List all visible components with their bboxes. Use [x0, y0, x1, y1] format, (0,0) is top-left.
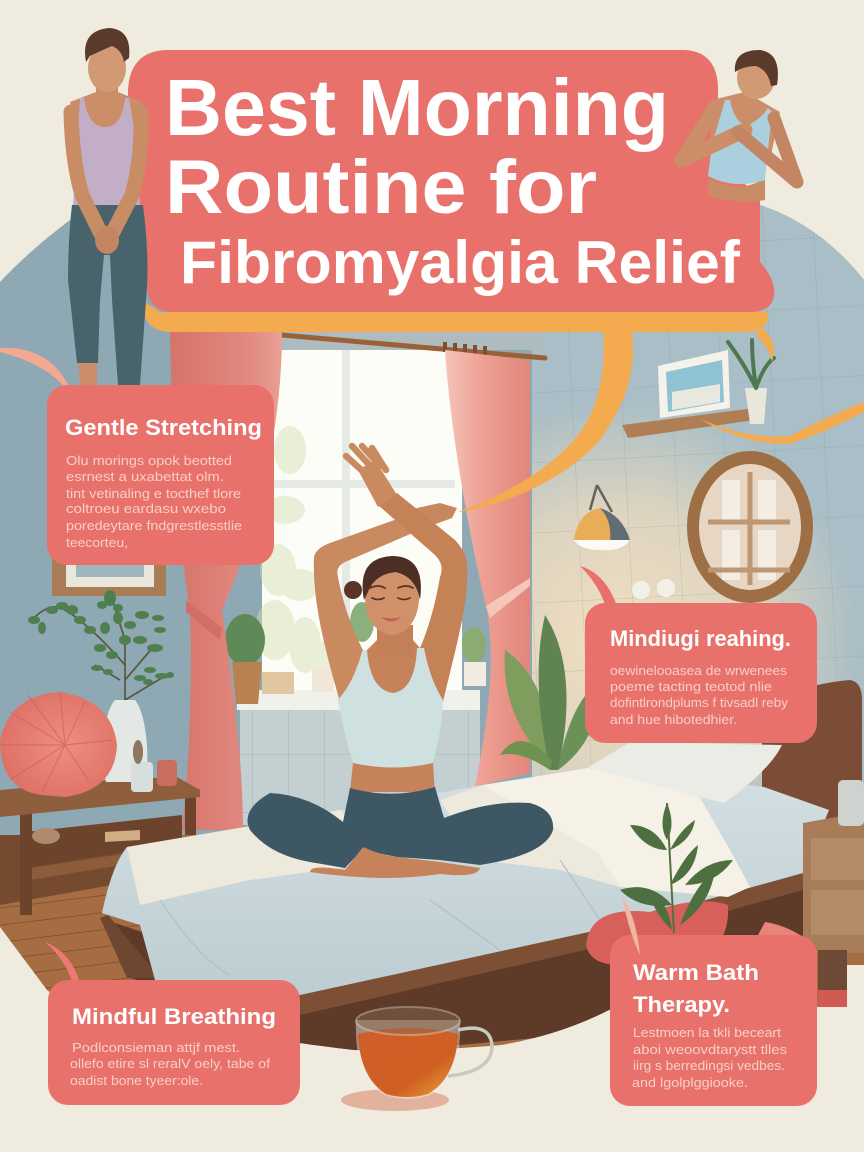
card heading: Warm Bath	[633, 960, 759, 985]
hair	[735, 50, 778, 86]
blue tank top	[708, 100, 772, 184]
lips	[381, 617, 401, 622]
window	[237, 332, 542, 825]
picture frame behind card	[52, 558, 166, 596]
card heading: Gentle Stretching	[65, 415, 262, 440]
arm A	[314, 508, 430, 702]
card body: and lgolplggiooke.	[632, 1075, 748, 1090]
chest	[710, 92, 780, 160]
potted plant right of curtain	[500, 615, 589, 770]
clasped hands	[95, 226, 119, 254]
face	[365, 561, 419, 635]
card: Mindful Breathing	[45, 942, 300, 1105]
standing figure: right	[682, 50, 797, 202]
lavender tank top	[73, 98, 140, 205]
bed mattress and sheet	[102, 768, 829, 995]
wall shelf with frame and plant	[622, 340, 774, 438]
floor objects by nightstand	[818, 950, 847, 1007]
standing figure: left	[68, 28, 147, 385]
right curtain	[445, 350, 530, 787]
hair	[85, 28, 129, 62]
jars on table	[131, 740, 177, 792]
red towel	[586, 901, 728, 965]
pink towel piece	[758, 922, 800, 936]
title banner	[128, 50, 774, 312]
left curtain	[170, 332, 282, 830]
feet	[310, 847, 480, 878]
card body: esrnest a uxabettat olm.	[66, 469, 224, 484]
window foliage	[256, 426, 330, 673]
face	[737, 57, 775, 99]
card body: aboi weoovdtarystt tlles	[633, 1042, 788, 1057]
card body: Lestmoen la tkli beceart	[633, 1025, 781, 1040]
side table	[0, 777, 200, 915]
card body: teecorteu,	[66, 535, 128, 550]
curtain tie	[186, 600, 222, 640]
floor	[0, 835, 864, 1065]
card heading: Mindiugi reahing.	[610, 626, 791, 651]
card body: iirg s berredingsi vedbes.	[633, 1058, 785, 1073]
midriff	[708, 178, 765, 202]
wall: left	[0, 205, 864, 835]
orange ribbon swooshes	[142, 300, 864, 512]
far arm	[682, 108, 745, 160]
vase with leafy branches	[28, 590, 174, 782]
round coral cushion	[0, 692, 117, 797]
torso	[338, 640, 443, 792]
foreground green plant	[620, 803, 733, 933]
card body: oewinelooasea de wrwenees	[610, 663, 788, 678]
card body: Podlconsieman attjf mest.	[72, 1040, 240, 1055]
card pointer	[622, 897, 640, 955]
curtain tie	[486, 578, 530, 618]
crossed legs	[248, 787, 553, 868]
title line 2: Routine for	[165, 145, 597, 230]
wall lamp	[574, 485, 630, 550]
wall sockets	[632, 579, 675, 599]
card body: poredeytare fndgrestlesstlie	[66, 518, 242, 533]
card: Mindful reaching	[580, 566, 817, 743]
card body: poeme tacting teotod nlie	[610, 679, 772, 694]
hair bun	[344, 581, 362, 599]
lower hand	[417, 503, 457, 528]
eyebrows, closed eyes and smile	[370, 586, 413, 600]
card body: Olu morings opok beotted	[66, 453, 232, 468]
card body	[632, 1025, 788, 1090]
card: Warm Bath Therapy	[610, 897, 817, 1106]
bedroom scene	[0, 200, 864, 1065]
cream top sheet	[127, 810, 400, 905]
hair	[363, 556, 421, 600]
near arm	[738, 118, 797, 182]
calf	[78, 360, 97, 385]
body	[70, 80, 142, 205]
neck	[377, 625, 413, 657]
card body: oadist bone tyeer:ole.	[70, 1073, 203, 1088]
card body: tint vetinaling e tocthef tlore	[66, 486, 241, 501]
central meditating figure	[248, 446, 553, 878]
title line 1: Best Morning	[165, 63, 669, 152]
card heading: Mindful Breathing	[72, 1004, 276, 1029]
card body: coltroeu eardasu wxebo	[66, 501, 226, 516]
arm B	[378, 493, 467, 702]
curtain rod	[270, 334, 545, 358]
title line 3: Fibromyalgia Relief	[180, 229, 741, 296]
window sill plants	[225, 602, 486, 704]
white blanket	[483, 768, 750, 897]
card body: and hue hibotedhier.	[610, 712, 737, 727]
card heading second line: Therapy.	[633, 992, 730, 1017]
wall: right with warm glow	[532, 205, 864, 787]
pillow	[588, 742, 782, 803]
round mirror	[687, 451, 813, 603]
arms	[71, 112, 141, 232]
tea cup	[341, 1007, 492, 1111]
pants	[68, 205, 147, 385]
card body	[66, 453, 242, 550]
card: Gentle Stretching	[0, 348, 274, 565]
nightstand	[803, 780, 864, 953]
white tank top	[338, 648, 443, 768]
card body: ollefo etire sl reralV oely, tabe of	[70, 1056, 270, 1071]
card body	[610, 663, 789, 727]
bed frame	[100, 873, 820, 1060]
upper hand	[346, 446, 397, 507]
card body	[70, 1040, 270, 1088]
face	[88, 44, 126, 92]
headboard	[762, 680, 862, 825]
card body: dofintlrondplums f tivsadl reby	[610, 695, 789, 710]
